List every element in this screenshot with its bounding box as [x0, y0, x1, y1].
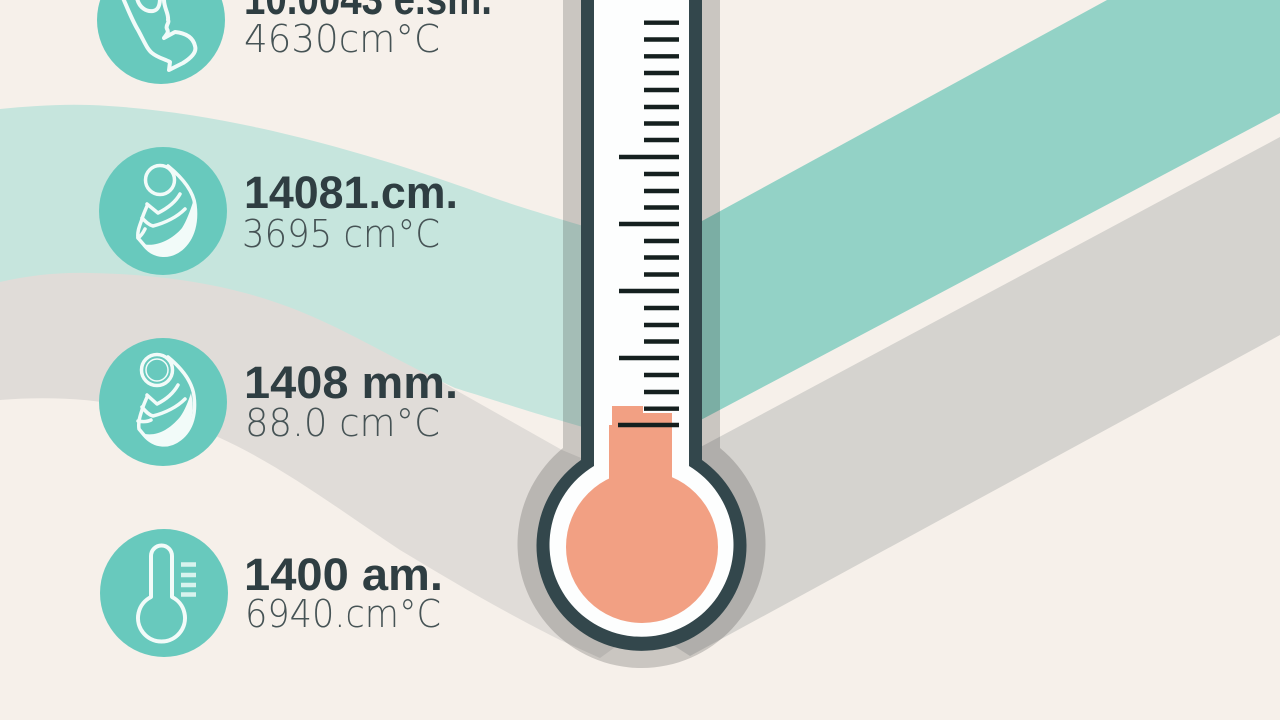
thermometer shadow halo	[517, 0, 766, 668]
row 4: thermometer reading	[100, 529, 443, 657]
row 2: swaddled baby reading	[99, 147, 458, 275]
reading: temperature: 3695 cm°C	[242, 212, 440, 256]
row 1: swaddled baby reading	[97, 0, 492, 84]
scale ticks	[618, 23, 679, 425]
thermometer	[517, 0, 766, 668]
gray ribbon left	[0, 260, 625, 658]
mercury bulb and column	[566, 406, 718, 623]
icon: swaddled baby	[99, 147, 227, 275]
reading: temperature: 4630cm°C	[244, 17, 440, 61]
row 3: swaddled baby reading	[99, 338, 458, 466]
teal ribbon left	[0, 105, 610, 435]
reading: length: 1400 am.	[244, 549, 443, 600]
reading: temperature: 6940.cm°C	[245, 592, 441, 636]
teal ribbon right	[680, 0, 1280, 431]
gray ribbon right	[665, 137, 1280, 656]
thermometer dark outline	[537, 0, 747, 651]
reading: length: 14081.cm.	[244, 167, 458, 218]
icon: thermometer	[100, 529, 228, 657]
icon: baby curled	[97, 0, 225, 84]
icon: swaddled baby	[99, 338, 227, 466]
reading: temperature: 88.0 cm°C	[245, 401, 440, 445]
thermometer white interior	[550, 0, 734, 637]
reading: length: 1408 mm.	[244, 357, 458, 408]
